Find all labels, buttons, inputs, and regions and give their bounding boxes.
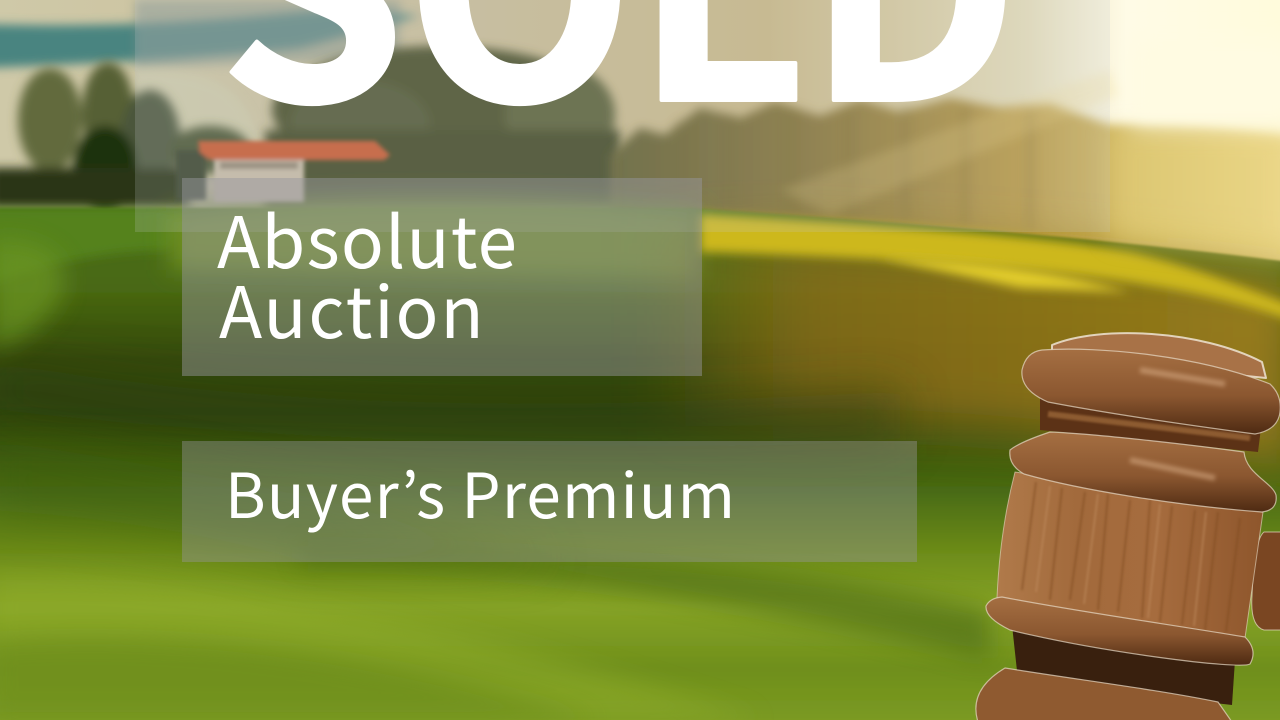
panel: Buyer's Premium xyxy=(182,441,917,562)
far tree line and sunlit haze xyxy=(610,98,1280,270)
gavel highlights xyxy=(1130,370,1225,478)
gavel lower collar xyxy=(986,597,1253,665)
gavel top cap xyxy=(1052,333,1266,378)
gavel body xyxy=(997,472,1263,638)
icon: wooden gavel xyxy=(976,333,1280,720)
gavel bottom ring xyxy=(976,668,1232,720)
soft mown stripes xyxy=(0,575,760,720)
tree streaks xyxy=(680,105,1030,230)
gavel upper ring xyxy=(1022,349,1280,434)
text: Buyer's Premium: Buyer’s Premium xyxy=(225,446,736,536)
text: Absolute Auction: Absolute xyxy=(217,187,518,289)
sunlight rays xyxy=(780,70,1120,215)
gavel neck xyxy=(1040,398,1262,452)
farmhouse xyxy=(176,141,390,202)
gavel lower ring xyxy=(1010,432,1276,512)
text: Absolute Auction: Auction xyxy=(219,257,485,359)
gavel handle xyxy=(1252,532,1280,630)
translucent panel behind SOLD xyxy=(135,0,1110,232)
meadow xyxy=(0,208,1280,720)
gavel lower neck xyxy=(1012,625,1235,705)
panel: Absolute Auction xyxy=(182,178,702,376)
